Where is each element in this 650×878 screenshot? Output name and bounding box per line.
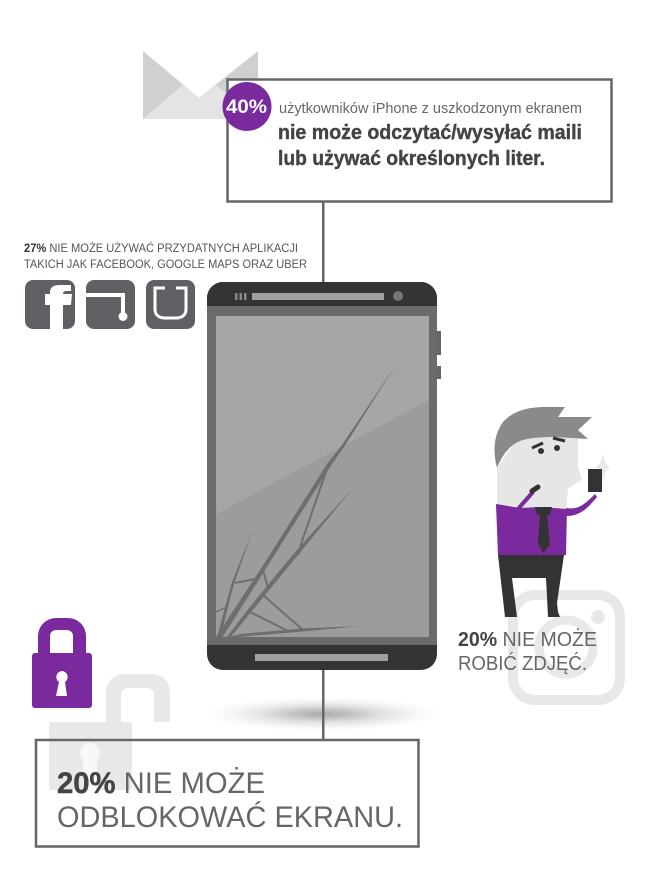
text: 20% photos xyxy=(458,628,597,675)
chin hand xyxy=(532,487,538,491)
icon: purple closed padlock xyxy=(32,618,92,708)
text: 20% photos: ROBIĆ ZDJĘĆ. xyxy=(458,652,587,675)
phone body xyxy=(207,282,437,645)
phone shadow xyxy=(205,697,441,731)
text: 27% apps xyxy=(24,242,307,271)
screen cracks xyxy=(216,363,397,638)
arm holding chin xyxy=(518,492,533,509)
text: bold line one: nie może odczytać/wysyłać maili xyxy=(278,121,582,144)
tie xyxy=(535,507,552,553)
text: 27% apps: TAKICH JAK FACEBOOK, GOOGLE MAPS ORAZ UBER xyxy=(24,259,307,271)
text: unlock line two: ODBLOKOWAĆ EKRANU. xyxy=(57,801,403,834)
home bar xyxy=(255,654,388,661)
hair xyxy=(495,407,592,468)
text: unlock line one: 20% NIE MOŻE xyxy=(57,767,265,800)
side buttons xyxy=(436,331,441,379)
text: bold line two: lub używać określonych liter. xyxy=(278,147,545,170)
icon: uber xyxy=(146,280,195,329)
legs xyxy=(498,555,564,617)
panel: 20% unlock callout xyxy=(36,740,418,846)
bottom bezel xyxy=(207,645,437,670)
icon: facebook xyxy=(25,280,75,329)
phone in hand xyxy=(588,469,602,492)
arm holding phone xyxy=(566,494,597,516)
eyebrows xyxy=(532,438,565,448)
screen xyxy=(216,316,429,637)
panel: 40% callout xyxy=(228,80,612,202)
illustration: man with phone xyxy=(495,407,610,617)
text: 40% intro line: użytkowników iPhone z uszkodzonym ekranem xyxy=(279,101,582,117)
illustration: phone xyxy=(207,282,441,670)
text: 27% apps: 27% NIE MOŻE UŻYWAĆ PRZYDATNYCH APLIKACJI xyxy=(24,242,298,255)
earpiece xyxy=(252,293,384,300)
icon: envelope xyxy=(143,51,258,119)
screen highlight xyxy=(216,316,429,514)
speaker dots xyxy=(235,293,246,300)
icon: google maps xyxy=(86,280,135,329)
connector: phone to bottom box xyxy=(322,670,324,740)
top bezel xyxy=(207,282,437,306)
face and neck xyxy=(497,435,582,512)
badge: 40%: 40% xyxy=(226,97,267,118)
badge: 40% xyxy=(222,82,272,131)
shirt xyxy=(496,504,567,555)
connector: top box to phone xyxy=(322,200,324,284)
text: 20% photos: 20% NIE MOŻE xyxy=(458,628,597,651)
camera xyxy=(393,291,403,301)
sparkle xyxy=(596,453,610,482)
eyes xyxy=(538,445,560,454)
icon: instagram outline xyxy=(513,595,620,700)
icon: grey open padlock xyxy=(49,674,170,790)
